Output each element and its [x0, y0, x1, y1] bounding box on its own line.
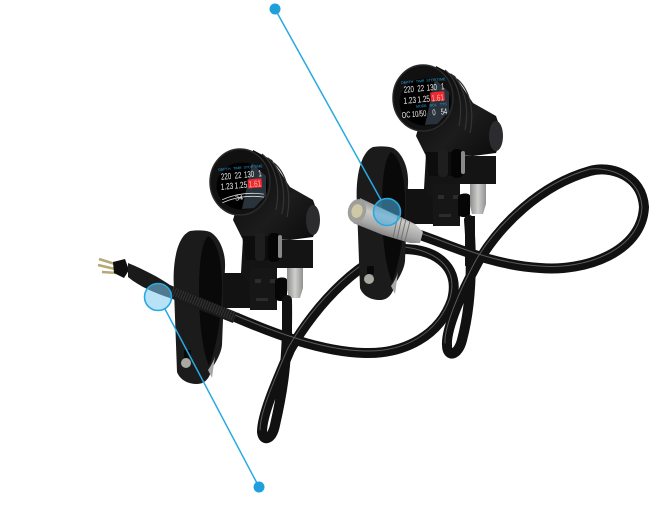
left unit screen readout: 22	[234, 170, 242, 181]
right unit screen readout	[399, 77, 449, 120]
right unit screen readout: MODE	[416, 104, 428, 109]
right unit screen readout: TIME	[416, 79, 425, 84]
left unit screen readout: 1	[258, 168, 262, 179]
right cable with loop	[420, 169, 644, 354]
left unit screen readout: 34	[235, 195, 243, 203]
left unit screen readout	[218, 164, 266, 204]
right unit screen readout: 0	[432, 107, 436, 118]
right unit screen readout: TTS	[440, 102, 447, 107]
bottom callout magnifier on cable	[144, 284, 172, 310]
top leader line and dot	[270, 4, 381, 200]
right unit screen readout: 1.25	[417, 93, 431, 105]
right unit screen readout: 54	[440, 106, 448, 117]
right unit screen readout: 22	[417, 83, 425, 94]
left unit screen readout: 1.61	[248, 178, 262, 190]
top callout magnifier on connector	[374, 198, 400, 226]
left unit screen readout: DEPTH	[218, 167, 231, 172]
left unit screen readout: 1.25	[234, 179, 248, 191]
left cable with loop	[235, 247, 454, 438]
right unit screen readout: TIME	[437, 77, 446, 82]
right unit screen readout: STOP	[426, 78, 437, 83]
right computer unit	[357, 65, 503, 300]
right unit screen readout: 1	[441, 81, 445, 92]
left unit screen readout: TIME	[254, 164, 263, 169]
right unit screen readout: 1.61	[431, 92, 444, 104]
bottom leader line and dot	[165, 309, 264, 492]
left unit screen readout: 130	[243, 169, 255, 180]
right unit screen readout: OC 10/50	[401, 108, 427, 120]
right unit screen readout: 130	[426, 82, 437, 93]
left unit screen readout: STOP	[243, 165, 254, 170]
left unit screen readout: 220	[221, 171, 232, 182]
left cable sleeve and pin plug	[98, 259, 236, 323]
right unit screen readout: 1.23	[403, 95, 417, 106]
right unit screen readout: 220	[403, 84, 414, 95]
silver push-pull connector	[345, 197, 423, 243]
left unit screen readout: TIME	[233, 166, 242, 171]
left computer unit	[174, 149, 320, 384]
right unit screen readout: NDL	[430, 103, 437, 108]
left unit screen readout: 1.23	[220, 181, 234, 192]
right unit screen readout: DEPTH	[401, 80, 414, 85]
